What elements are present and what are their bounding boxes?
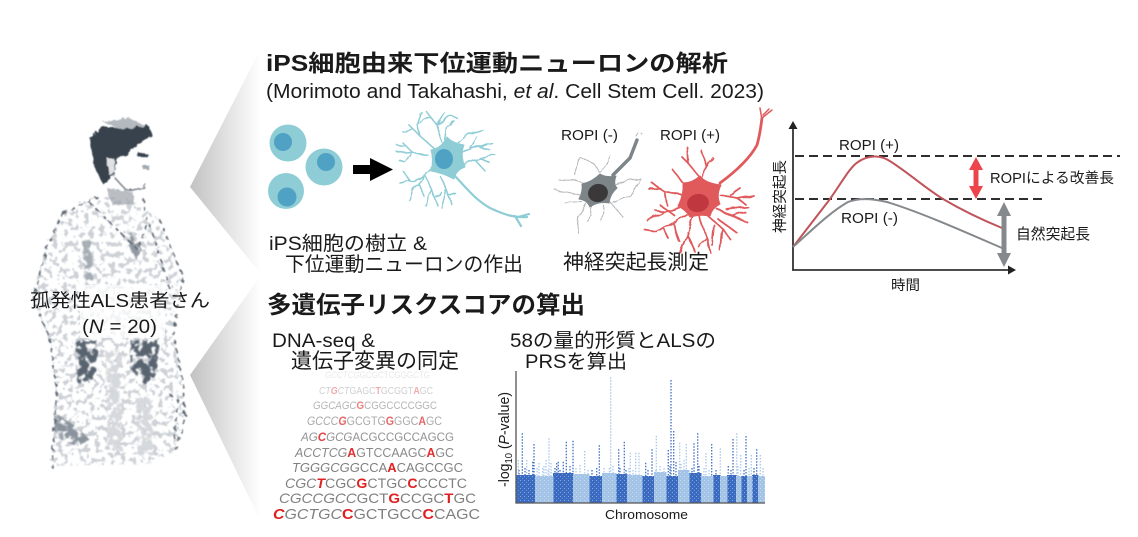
label: ROPI plus curve: ROPI (+) xyxy=(839,138,899,154)
curve: ROPI plus xyxy=(793,156,1002,247)
sequence reads xyxy=(273,370,480,523)
dashed upper level xyxy=(795,155,1120,157)
sequence reads: CGCTGC CGCTGCC CCAGC xyxy=(273,507,480,523)
sequence reads: TGGGCGGCCAACAGCCGC xyxy=(292,460,463,475)
dashed lower level xyxy=(795,198,1044,200)
figure: robe outline xyxy=(33,197,185,467)
patient label xyxy=(30,290,210,338)
title: iPS analysis heading: iPS細胞由来下位運動ニューロンの解析 xyxy=(266,50,728,76)
sequence reads: GCCCGGCGTGGGGCAGC xyxy=(307,416,442,428)
icon: motor neuron xyxy=(398,110,529,226)
label: ROPI minus neuron: ROPI (-) xyxy=(561,128,618,144)
figure: label backing band xyxy=(80,285,165,338)
y axis title: -log xyxy=(496,462,513,487)
manhattan plot xyxy=(496,371,765,522)
arrow: differentiation xyxy=(353,158,393,181)
figure: robe shadows xyxy=(53,232,158,455)
arrow: natural length xyxy=(997,202,1011,267)
text: DNA-seq caption: DNA-seq & xyxy=(272,331,375,352)
figure: robe flecks xyxy=(33,197,185,467)
axes xyxy=(516,371,765,503)
y axis title: 神経突起長 xyxy=(772,160,789,233)
patient label: 孤発性ALS患者さん xyxy=(30,290,210,311)
x axis xyxy=(792,266,1016,274)
y axis title: ( xyxy=(496,444,513,453)
label: ROPI minus curve: ROPI (-) xyxy=(841,211,898,227)
x axis title: Chromosome xyxy=(605,508,688,522)
curve: ROPI minus xyxy=(793,199,1002,248)
text: DNA-seq caption: 遺伝子変異の同定 xyxy=(291,350,459,373)
sequence reads: GCCTCGGCGCTCGGGCTG xyxy=(325,370,430,380)
arrow: improvement xyxy=(969,157,983,199)
label: natural length: 自然突起長 xyxy=(1016,226,1090,243)
chevron: upper pointer toward iPS analysis xyxy=(190,48,261,274)
y axis xyxy=(788,121,798,270)
icon: neuron ROPI minus xyxy=(555,133,642,232)
y axis title: P-value) xyxy=(496,389,513,444)
text: iPS establishment caption xyxy=(269,233,523,276)
y axis title: 10 xyxy=(504,453,515,464)
patient label: (N = 20) xyxy=(82,317,157,338)
icon: neuron ROPI plus xyxy=(645,108,772,252)
text: DNA-seq caption xyxy=(272,331,459,373)
light spikes xyxy=(518,377,763,476)
citation: (Morimoto and Takahashi, et al. Cell Stem Cell. 2023) xyxy=(266,81,764,103)
title: polygenic risk score heading: 多遺伝子リスクスコアの算出 xyxy=(267,292,585,319)
patient figure xyxy=(33,118,185,467)
sequence reads: ACCTCGAGTCCAAGCAGC xyxy=(294,446,454,460)
dark spikes xyxy=(519,380,757,476)
figure: neck and face xyxy=(107,178,145,205)
chromosome blocks xyxy=(516,470,765,503)
text: iPS establishment caption: iPS細胞の樹立 & xyxy=(269,233,427,255)
label: improvement: ROPIによる改善長 xyxy=(990,170,1114,187)
x axis title: 時間 xyxy=(891,277,920,293)
text: PRS caption: PRSを算出 xyxy=(525,351,627,373)
sequence reads: GGCAGCGCGGCCCCGGC xyxy=(313,400,437,412)
sequence reads: CGCCGCC GCTGCCGCTGC xyxy=(279,490,476,506)
sequence reads: CTGCTGAGCTGCGGTAGC xyxy=(319,386,433,397)
label: ROPI plus neuron: ROPI (+) xyxy=(660,128,720,144)
sequence reads: CGCTCGCGCTGCCCCCTC xyxy=(285,476,467,491)
text: iPS establishment caption: 下位運動ニューロンの作出 xyxy=(285,253,523,276)
icon: iPS cells xyxy=(268,124,342,209)
text: PRS caption xyxy=(510,330,716,373)
line chart: neurite length over time xyxy=(772,121,1120,293)
text: PRS caption: 58の量的形質とALSの xyxy=(510,330,716,352)
sequence reads: AGCGCGACGCCGCCAGCG xyxy=(300,430,454,444)
chevron: lower pointer toward polygenic risk score xyxy=(190,275,261,522)
figure: hair xyxy=(90,118,152,184)
text: neurite length measurement caption: 神経突起長測定 xyxy=(563,251,709,274)
